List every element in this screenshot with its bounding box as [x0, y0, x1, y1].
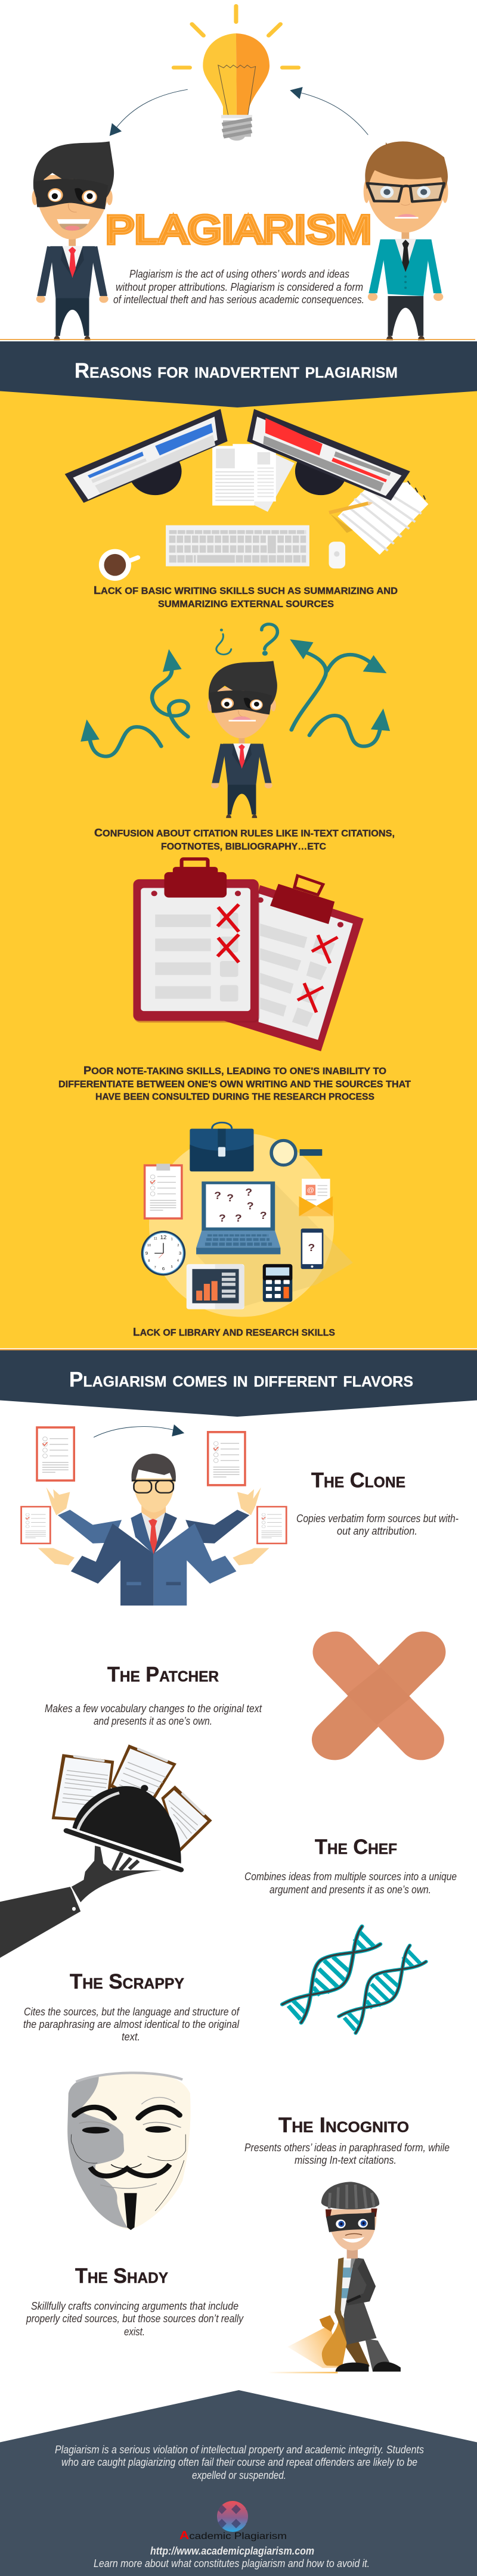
banner: reasons for inadvertent plagiarism — [0, 341, 477, 407]
icon: academic plagiarism logo — [179, 2501, 287, 2542]
icon: briefcase — [190, 1122, 254, 1171]
caption: note-taking skills: POOR NOTE-TAKING SKILLS, LEADING TO ONE'S INABILITY TO — [83, 1064, 386, 1077]
icon: wall clock: 8 — [148, 1259, 150, 1263]
text: shady description: exist. — [124, 2326, 145, 2338]
icon: laptop with question marks: ? — [214, 1190, 221, 1201]
icon: Guy Fawkes mask — [67, 2072, 191, 2230]
text: clone description: Copies verbatim form sources but with- — [296, 1513, 459, 1525]
text: plagiarism definition: without proper attributions. Plagiarism is considered a form — [116, 281, 363, 293]
panel: the patcher — [45, 1652, 423, 1740]
heading: PLAGIARISM title: PLAGIARISM — [106, 207, 371, 251]
panel: the shady — [26, 2072, 244, 2338]
illustration: desk with monitors, papers, keyboard — [65, 409, 428, 581]
character: confused thief — [207, 661, 277, 818]
text: shady description: properly cited sources, but those sources don’t really — [26, 2313, 244, 2325]
panel: conclusion footer — [0, 2390, 477, 2576]
icon: laptop with question marks: ? — [235, 1212, 242, 1224]
text: closing statement: Plagiarism is a serious violation of intellectual property and academic integrity. Students — [55, 2444, 424, 2456]
text: scrappy description — [23, 2006, 240, 2043]
heading: the patcher: The Patcher — [107, 1663, 219, 1686]
icon: laptop with question marks: ? — [247, 1200, 254, 1212]
caption: citation rules: FOOTNOTES, BIBLIOGRAPHY…ETC — [161, 842, 326, 852]
heading: the scrappy: The Scrappy — [70, 1970, 184, 1993]
illustration: clipboards with red crosses — [133, 859, 364, 1051]
icon: wall clock: 7 — [154, 1266, 156, 1270]
arrow: student to bulb — [290, 87, 368, 135]
icon: wall clock: 1 — [171, 1238, 173, 1241]
text: website url: http://www.academicplagiarism.com — [150, 2545, 314, 2557]
text: patcher description: and presents it as one’s own. — [94, 1715, 212, 1727]
caption: citation rules: CONFUSION ABOUT CITATION RULES LIKE IN-TEXT CITATIONS, — [94, 826, 395, 839]
heading: the clone: The Clone — [311, 1469, 405, 1492]
icon: wall clock: 10 — [147, 1244, 151, 1247]
text: clone description — [296, 1513, 459, 1537]
panel: hero introduction — [0, 6, 475, 340]
icon: wall clock — [141, 1231, 185, 1275]
icon: tablet with bar chart — [187, 1264, 244, 1309]
icon: checklist clipboard — [144, 1163, 183, 1219]
icon: laptop with question marks: ? — [245, 1186, 252, 1198]
icon: light bulb — [174, 6, 299, 141]
icon: wall clock: 3 — [179, 1250, 181, 1256]
character: burglar with sack — [268, 2182, 401, 2373]
text: closing statement: who are caught plagiarizing often fail their course and repeat offenders are likely to be — [61, 2456, 417, 2468]
illustration: four-armed man with documents — [20, 1424, 287, 1606]
caption: library skills: LACK OF LIBRARY AND RESEARCH SKILLS — [133, 1326, 335, 1338]
text: patcher description — [45, 1703, 262, 1727]
panel: the incognito — [244, 2114, 450, 2373]
icon: wall clock: 6 — [162, 1266, 165, 1271]
illustration: hand holding cloche with clipboards — [0, 1744, 212, 1958]
character: worried student with glasses — [364, 141, 448, 340]
icon: wall clock: 9 — [145, 1250, 148, 1256]
text: shady description: Skillfully crafts convincing arguments that include — [31, 2300, 238, 2312]
icon: laptop with question marks: ? — [219, 1212, 226, 1224]
icon: tangled arrows — [80, 624, 390, 757]
text: plagiarism definition: Plagiarism is the act of using others’ words and ideas — [129, 268, 349, 280]
icon: laptop with question marks: ? — [227, 1191, 234, 1203]
icon: wall clock: 5 — [171, 1265, 173, 1269]
icon: smartphone — [301, 1228, 323, 1269]
illustration: confused thief with arrows — [80, 624, 390, 818]
caption: note-taking skills: HAVE BEEN CONSULTED DURING THE RESEARCH PROCESS — [95, 1092, 374, 1102]
text: patcher description: Makes a few vocabulary changes to the original text — [45, 1703, 262, 1715]
panel: reasons yellow background — [0, 381, 477, 1348]
heading: PLAGIARISM title: PLAGIARISM — [106, 207, 371, 251]
panel: the chef — [0, 1744, 457, 1958]
heading: the shady: The Shady — [75, 2264, 168, 2288]
illustration: library and research icons — [141, 1122, 353, 1317]
caption: note-taking skills: DIFFERENTIATE BETWEEN ONE'S OWN WRITING AND THE SOURCES THAT — [58, 1079, 411, 1090]
icon: email envelope — [299, 1179, 333, 1217]
text: scrappy description: text. — [122, 2031, 140, 2043]
text: plagiarism definition: of intellectual theft and has serious academic consequences. — [113, 294, 364, 306]
icon: smartphone: ? — [308, 1242, 315, 1253]
text: shady description — [26, 2300, 244, 2338]
heading: the chef: The Chef — [315, 1835, 397, 1859]
text: incognito description — [244, 2142, 450, 2166]
banner: different flavors — [0, 1350, 477, 1417]
character: masked thief — [32, 141, 114, 340]
icon: crossed bandages — [334, 1652, 423, 1740]
text: chef description: argument and presents it as one’s own. — [270, 1884, 431, 1896]
text: incognito description: missing In-text citations. — [295, 2154, 397, 2166]
icon: DNA helixes — [282, 1927, 426, 2033]
icon: wall clock: 11 — [154, 1237, 157, 1240]
icon: laptop with question marks — [196, 1181, 280, 1254]
text: scrappy description: the paraphrasing are almost identical to the original — [23, 2018, 240, 2030]
icon: academic plagiarism logo: Academic Plagiarism — [179, 2530, 287, 2542]
icon: wall clock: 2 — [177, 1244, 179, 1247]
text: plagiarism definition — [113, 268, 364, 306]
caption: citation rules — [94, 826, 395, 852]
caption: writing skills: SUMMARIZING EXTERNAL SOURCES — [158, 599, 334, 609]
heading: the incognito: The Incognito — [278, 2114, 409, 2137]
caption: note-taking skills — [58, 1064, 411, 1102]
text: clone description: out any attribution. — [337, 1525, 417, 1537]
text: closing statement — [55, 2444, 424, 2481]
text: closing statement: expelled or suspended. — [192, 2469, 286, 2481]
text: scrappy description: Cites the sources, but the language and structure of — [24, 2006, 240, 2018]
text: learn more: Learn more about what constitutes plagiarism and how to avoid it. — [94, 2558, 370, 2569]
icon: wall clock: 4 — [177, 1259, 179, 1262]
icon: email envelope: @ — [307, 1187, 314, 1194]
text: incognito description: Presents others’ ideas in paraphrased form, while — [244, 2142, 450, 2154]
icon: calculator — [263, 1264, 292, 1302]
heading: flavors section: Plagiarism comes in different flavors — [69, 1368, 413, 1392]
panel: the scrappy — [23, 1927, 426, 2043]
caption: writing skills: LACK OF BASIC WRITING SKILLS SUCH AS SUMMARIZING AND — [94, 584, 398, 596]
icon: wall clock: 12 — [160, 1235, 166, 1240]
icon: magnifying glass — [271, 1140, 322, 1165]
icon: laptop with question marks: ? — [260, 1209, 267, 1221]
caption: writing skills — [94, 584, 398, 609]
text: chef description — [244, 1871, 457, 1896]
arrow: bulb to thief — [110, 89, 188, 136]
panel: the clone — [20, 1424, 459, 1606]
heading: reasons section: Reasons for inadvertent plagiarism — [75, 359, 398, 382]
